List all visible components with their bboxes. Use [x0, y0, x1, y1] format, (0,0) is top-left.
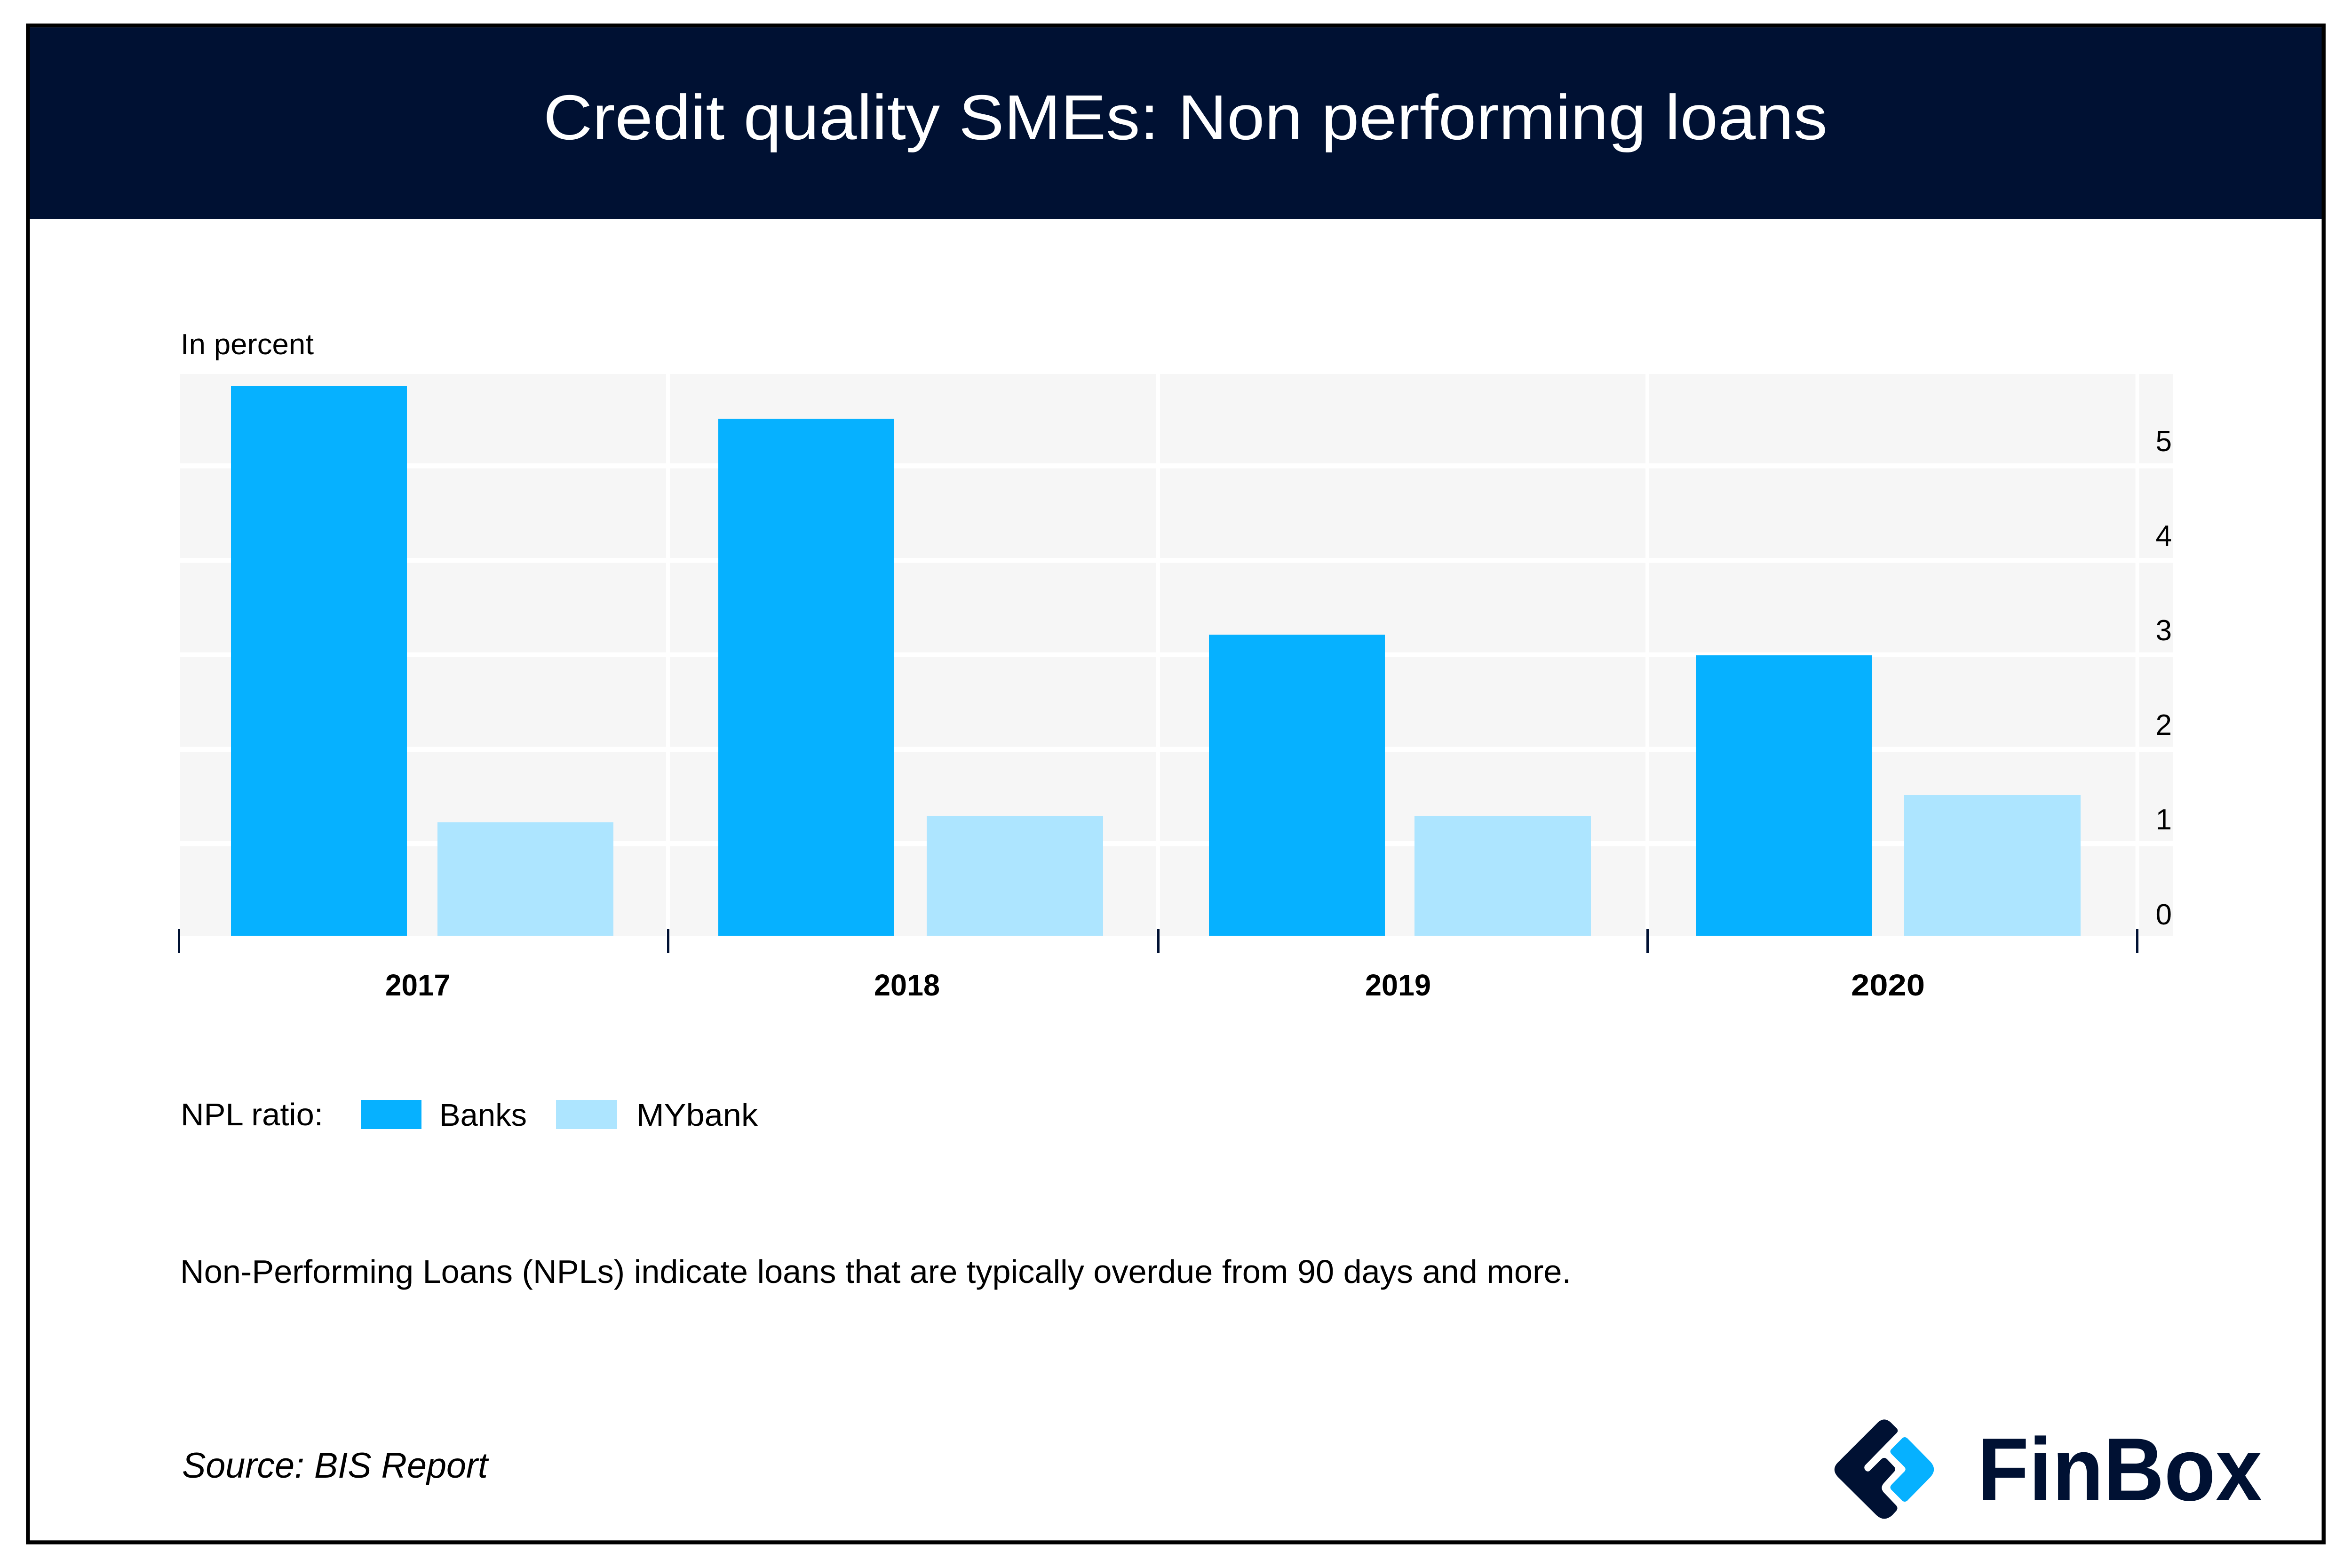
bars 2018 — [718, 419, 1103, 936]
title banner — [30, 27, 2322, 219]
x axis year labels: 2018 — [874, 968, 940, 1002]
legend: Banks: Banks — [439, 1098, 527, 1133]
y axis labels — [2156, 425, 2172, 931]
x axis ticks — [178, 929, 2138, 953]
y axis labels: 1 — [2156, 804, 2172, 836]
legend: NPL ratio: — [181, 1097, 323, 1132]
icon: FinBox mark — [1835, 1419, 1934, 1519]
bars 2019 — [1209, 635, 1591, 936]
legend — [181, 1097, 758, 1133]
y axis labels: 0 — [2156, 899, 2172, 931]
bars 2020 — [1696, 655, 2081, 936]
chart background — [180, 374, 2173, 936]
x axis year labels — [385, 968, 1925, 1002]
bar chart — [178, 374, 2173, 1002]
source: Source: BIS Report — [182, 1446, 489, 1486]
x axis year labels: 2020 — [1851, 968, 1925, 1002]
FinBox logo — [1835, 1419, 2262, 1520]
y axis labels: 4 — [2156, 520, 2172, 552]
bars 2017 — [231, 386, 613, 936]
x axis year labels: 2017 — [385, 968, 450, 1002]
title: Credit quality SMEs: Non performing loans — [543, 82, 1828, 153]
legend: MYbank: MYbank — [636, 1098, 758, 1133]
legend: Banks — [361, 1098, 527, 1133]
y axis unit label: In percent — [181, 328, 314, 361]
x axis year labels: 2019 — [1365, 968, 1431, 1002]
y axis labels: 5 — [2156, 425, 2172, 458]
y axis labels: 3 — [2156, 614, 2172, 647]
legend: MYbank — [556, 1098, 758, 1133]
wordmark: FinBox — [1978, 1420, 2262, 1520]
y axis labels: 2 — [2156, 709, 2172, 741]
note text: Non-Performing Loans (NPLs) indicate loans that are typically overdue from 90 days and more. — [180, 1253, 1571, 1290]
